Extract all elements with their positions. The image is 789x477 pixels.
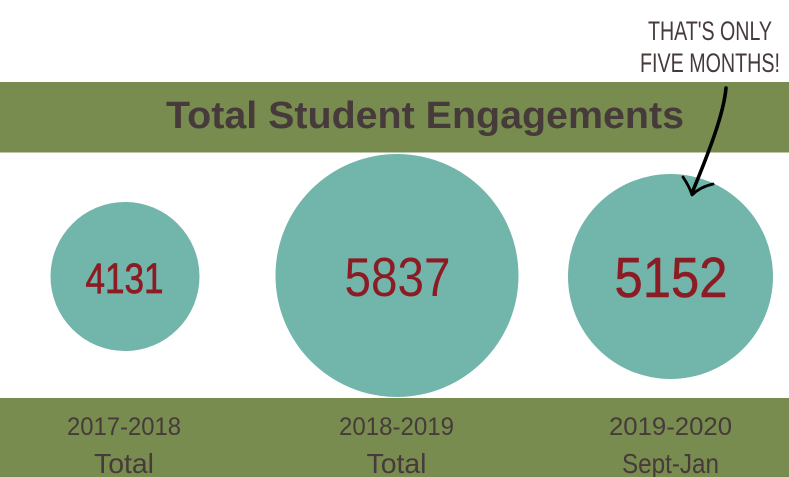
- callout note: [640, 16, 780, 78]
- value: 5152: 5152: [614, 246, 728, 310]
- value: 4131: 4131: [86, 255, 164, 303]
- title: Total Student Engagements: [166, 95, 684, 137]
- bubble: 2019-2020: [568, 174, 773, 379]
- label: 2018-2019 Total: 2018-2019: [339, 413, 454, 441]
- bubble: 2018-2019: [276, 154, 518, 397]
- title banner: [0, 82, 789, 152]
- label: 2017-2018 Total: 2017-2018: [67, 413, 181, 441]
- label: 2018-2019 Total: [339, 413, 454, 477]
- label: 2019-2020 Sept-Jan: 2019-2020: [609, 413, 732, 441]
- value: 5837: 5837: [344, 246, 450, 308]
- arrow: [683, 88, 726, 195]
- bottom label band: [0, 398, 789, 477]
- bubble: 2017-2018: [50, 202, 200, 351]
- label: 2019-2020 Sept-Jan: [609, 413, 732, 477]
- label: 2017-2018 Total: [67, 413, 181, 477]
